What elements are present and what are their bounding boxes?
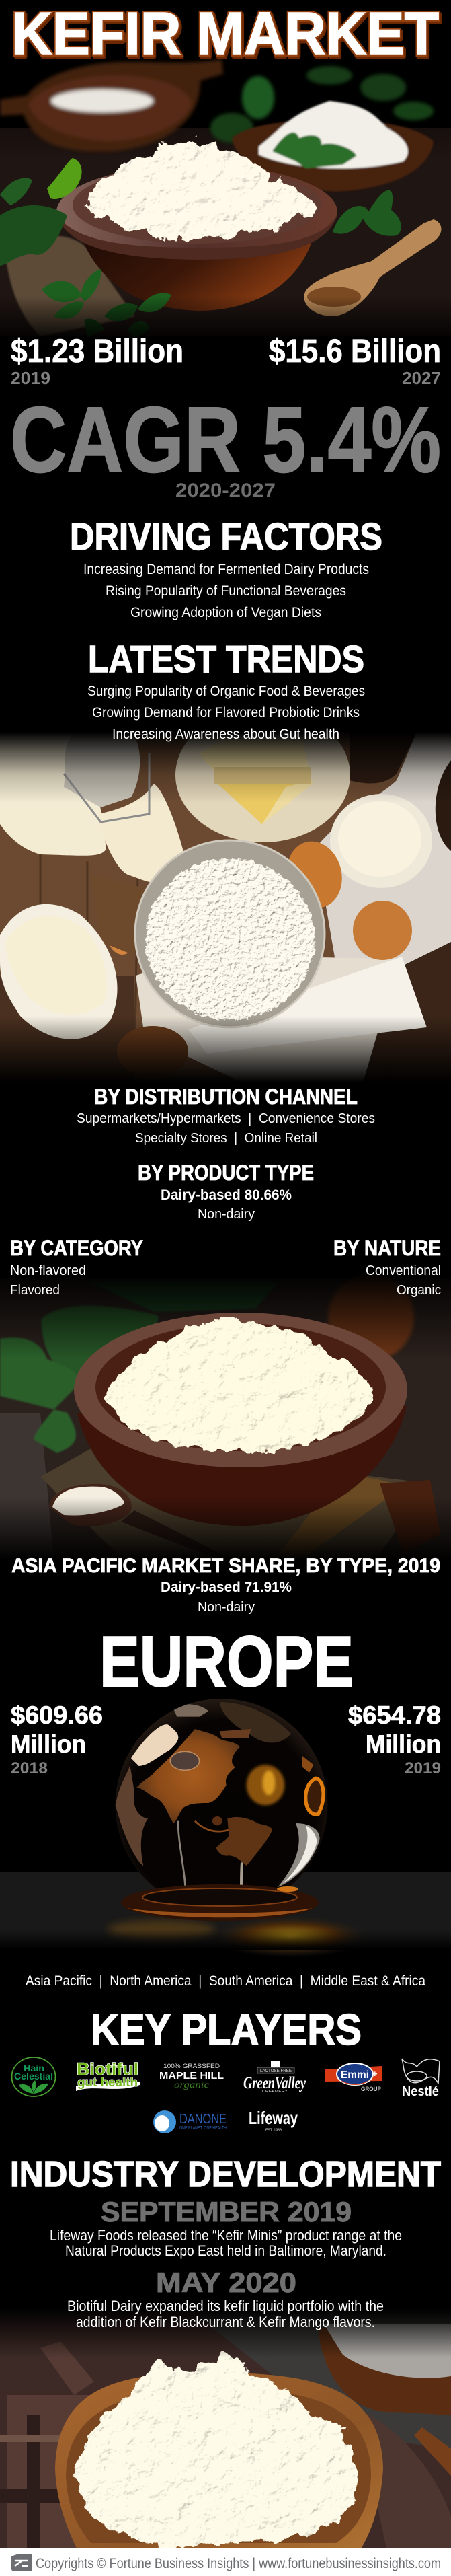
icon: fortune business insights logo <box>11 2554 32 2571</box>
logo: lifeway <box>249 2108 298 2133</box>
market value 2027 <box>269 334 441 388</box>
burlap cloth <box>5 236 134 336</box>
background bowl <box>318 2328 451 2415</box>
logo: maple hill: organic <box>174 2080 210 2090</box>
cutting board and paper <box>136 955 397 1082</box>
wooden bowl cheese <box>73 2353 358 2546</box>
latest trends <box>87 638 365 742</box>
logo: maple hill: MAPLE HILL <box>159 2070 224 2082</box>
logo: danone: ONE PLANET. ONE HEALTH <box>179 2126 227 2131</box>
brown egg <box>117 1026 188 1066</box>
europe value 2018: 2018 <box>11 1759 48 1777</box>
market value 2019: 2019 <box>11 368 50 388</box>
spoon <box>304 219 441 316</box>
by product type: Dairy-based 80.66% <box>161 1187 292 1203</box>
market value 2027: 2027 <box>402 368 441 388</box>
right orange land <box>306 1778 323 1814</box>
bowl of cream <box>0 904 118 1039</box>
latest trends: Surging Popularity of Organic Food & Beverages <box>87 684 365 699</box>
logo: lifeway: EST. 1986 <box>265 2129 282 2133</box>
table surface <box>0 1872 451 1958</box>
by category: Non-flavored <box>10 1263 86 1278</box>
key players heading: KEY PLAYERS <box>91 2005 362 2054</box>
logo: hain celestial <box>12 2057 55 2096</box>
by distribution channel: Specialty Stores | Online Retail <box>135 1131 317 1146</box>
globe <box>116 1699 328 1921</box>
europe value 2018: Million <box>11 1730 86 1758</box>
CAGR: 2020-2027 <box>175 480 276 502</box>
lower dark wood <box>0 976 134 1066</box>
front right leaves <box>333 190 401 236</box>
by distribution channel: BY DISTRIBUTION CHANNEL <box>94 1084 358 1109</box>
europe value 2019: 2019 <box>405 1759 441 1777</box>
driving factors <box>70 515 382 620</box>
burlap <box>105 886 138 953</box>
by distribution channel: Supermarkets/Hypermarkets | Convenience Stores <box>77 1111 375 1126</box>
logo: maple hill: 100% GRASSFED <box>163 2063 220 2069</box>
regions: Asia Pacific | North America | South America | Middle East & Africa <box>26 1973 425 1989</box>
logo: emmi: Emmi <box>341 2069 369 2081</box>
main bowl cheese <box>87 141 314 239</box>
plaid cloth <box>0 2341 101 2548</box>
cottage cheese glass bowl <box>135 840 325 1027</box>
logo: emmi <box>325 2063 382 2092</box>
by distribution channel <box>77 1084 375 1146</box>
september 2019 development: Natural Products Expo East held in Baltimore, Maryland. <box>65 2242 386 2259</box>
logo: green valley: CREAMERY <box>262 2090 288 2094</box>
driving factors: Increasing Demand for Fermented Dairy Products <box>83 562 369 577</box>
wood planks <box>39 854 138 1029</box>
south america <box>216 1817 272 1866</box>
small spoon <box>49 1484 229 1558</box>
glass highlight <box>278 1823 320 1887</box>
gold glitter <box>247 1765 284 1805</box>
big bowl cheese <box>106 1322 372 1450</box>
marble board <box>316 732 451 1082</box>
by product type: BY PRODUCT TYPE <box>138 1161 314 1185</box>
islands <box>212 1816 222 1825</box>
by product type <box>138 1161 314 1222</box>
drips <box>178 1821 186 1897</box>
footer <box>0 2548 451 2576</box>
logo: hain celestial: Hain <box>24 2063 44 2073</box>
driving factors: Growing Adoption of Vegan Diets <box>130 605 321 620</box>
market value 2019 <box>11 334 183 388</box>
logo: nestle: Nestlé <box>402 2084 439 2099</box>
herbs left <box>0 158 82 266</box>
milk jug <box>0 727 106 856</box>
logo: maple hill <box>159 2063 224 2090</box>
milk bottle <box>64 732 188 883</box>
herbs <box>0 1282 279 1453</box>
cloth <box>40 1443 430 1558</box>
by product type: Non-dairy <box>198 1207 255 1222</box>
europe heading: EUROPE <box>99 1622 354 1701</box>
photo: large clay bowl of cheese <box>0 1272 451 1561</box>
logo: nestle <box>402 2059 440 2099</box>
asia pacific market share <box>11 1555 440 1615</box>
asia pacific market share: Non-dairy <box>198 1600 255 1615</box>
market value 2019: $1.23 Billion <box>11 334 183 369</box>
wooden handles <box>380 1480 440 1554</box>
logo: danone: DANONE <box>179 2112 227 2127</box>
driving factors: Rising Popularity of Functional Beverages <box>106 583 346 599</box>
driving factors: DRIVING FACTORS <box>70 515 382 558</box>
may 2020 development: Biotiful Dairy expanded its kefir liquid portfolio with the <box>67 2297 384 2314</box>
may 2020 development <box>67 2267 384 2330</box>
back right bowl <box>232 101 434 192</box>
logo: biotiful gut health: Biotiful <box>77 2060 138 2079</box>
logo: green valley <box>243 2061 306 2094</box>
left continent <box>116 1765 148 1866</box>
logo: hain celestial: Celestial <box>14 2071 53 2082</box>
europe value 2018 <box>11 1701 103 1777</box>
asia continent <box>136 1729 240 1823</box>
photo: dairy products spread <box>0 708 451 1085</box>
by category: BY CATEGORY <box>10 1236 143 1260</box>
asia pacific market share: Dairy-based 71.91% <box>161 1580 292 1595</box>
may 2020 development: addition of Kefir Blackcurrant & Kefir Mango flavors. <box>76 2314 375 2330</box>
logo: emmi: + <box>372 2069 378 2079</box>
may 2020 development: MAY 2020 <box>156 2267 296 2298</box>
globe base <box>121 1884 319 1921</box>
by nature <box>333 1236 441 1298</box>
photo: bowls of kefir cheese with herbs <box>0 57 451 344</box>
by category: Flavored <box>10 1283 60 1298</box>
europe value 2019 <box>348 1701 441 1777</box>
cinnamon <box>414 2427 451 2476</box>
september 2019 development: Lifeway Foods released the “Kefir Minis” product range at the <box>50 2227 402 2244</box>
europe value 2018: $609.66 <box>11 1701 103 1729</box>
small bowl of yogurt <box>330 794 432 888</box>
eggs <box>105 835 412 960</box>
main bowl <box>56 165 337 311</box>
logo: danone <box>153 2110 227 2133</box>
september 2019 development <box>50 2196 402 2259</box>
photo: wooden bowl of cheese <box>0 2308 451 2556</box>
bright highlight <box>131 1724 178 1766</box>
logo: emmi: GROUP <box>361 2086 381 2092</box>
back herbs <box>210 66 434 143</box>
september 2019 development: SEPTEMBER 2019 <box>101 2196 352 2228</box>
key player logos <box>12 2057 440 2133</box>
jar <box>328 1274 414 1360</box>
logo: biotiful gut health: gut health <box>77 2075 138 2089</box>
europe value 2019: $654.78 <box>348 1701 441 1729</box>
logo: biotiful gut health <box>76 2060 140 2091</box>
latest trends: Increasing Awareness about Gut health <box>112 727 339 742</box>
logo: green valley: GreenValley <box>243 2074 306 2092</box>
by nature: Conventional <box>366 1263 441 1278</box>
latest trends: LATEST TRENDS <box>88 638 364 681</box>
plate with butter <box>175 735 350 842</box>
big bowl <box>74 1313 407 1526</box>
mint sprig <box>42 269 171 340</box>
logo: lifeway: Lifeway <box>249 2108 298 2128</box>
upper right sphere tint <box>220 1702 291 1742</box>
by category <box>10 1236 143 1298</box>
back left bowl <box>0 59 223 151</box>
logo: green valley: LACTOSE FREE <box>260 2069 292 2073</box>
wooden bowl <box>55 2373 383 2556</box>
by nature: Organic <box>397 1283 441 1298</box>
latest trends: Growing Demand for Flavored Probiotic Drinks <box>92 705 360 721</box>
europe value 2019: Million <box>366 1730 441 1758</box>
